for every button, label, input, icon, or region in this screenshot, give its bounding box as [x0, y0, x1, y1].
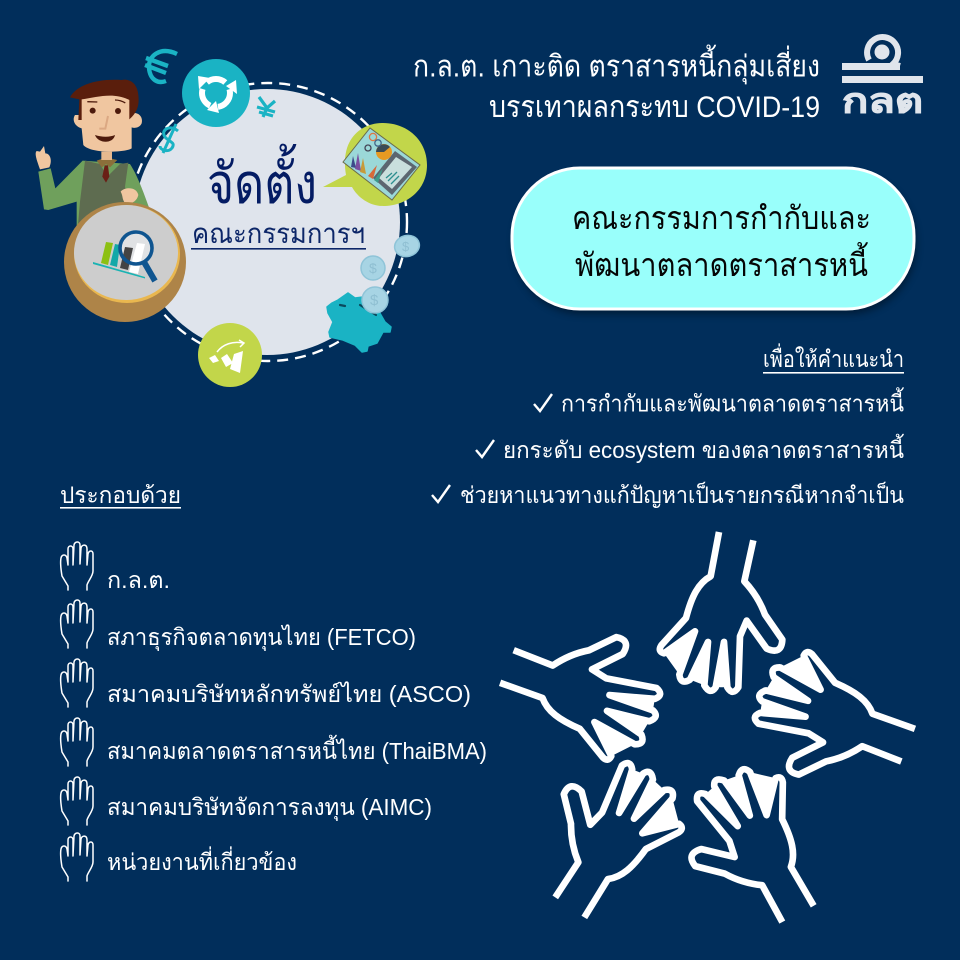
icon: recycle circle: [182, 59, 250, 127]
purpose list: [432, 388, 904, 508]
magnifier disc: [64, 202, 186, 322]
title: [413, 44, 820, 124]
icon: piggy bank: [327, 293, 391, 352]
circle heading: จัดตั้ง: [207, 144, 317, 215]
members list: สมาคมบริษัทหลักทรัพย์ไทย (ASCO): [107, 681, 471, 707]
icon: dollar: [160, 124, 178, 153]
members list: [61, 542, 487, 881]
jacket and arms: [38, 161, 150, 227]
main light circle: [134, 89, 400, 355]
raised hand: [36, 146, 51, 169]
title: ก.ล.ต. เกาะติด ตราสารหนี้กลุ่มเสี่ยง: [413, 44, 820, 86]
illustration: committee circle: [36, 51, 427, 387]
icon: coins: [361, 233, 422, 313]
icon: five joined hands: [491, 532, 924, 947]
person: [36, 80, 150, 227]
purpose heading: เพื่อให้คำแนะนำ: [763, 343, 904, 372]
collar and tie: [97, 157, 117, 167]
panel: committee name pill: [512, 168, 916, 314]
face details: [90, 108, 96, 114]
icon: euro: [145, 51, 177, 82]
panel: committee name pill: คณะกรรมการกำกับและ: [572, 200, 871, 236]
icon: coins: $: [369, 260, 377, 276]
members heading: ประกอบด้วย: [60, 482, 181, 508]
circle sub heading: คณะกรรมการฯ: [192, 218, 365, 249]
resting hand: [121, 188, 138, 203]
icon: coins: $: [402, 239, 410, 254]
members list: ก.ล.ต.: [107, 567, 170, 593]
logo: กลต: [842, 82, 923, 120]
icon: tablet speech bubble: [323, 123, 427, 206]
hair: [70, 80, 139, 120]
purpose list: การกำกับและพัฒนาตลาดตราสารหนี้: [561, 388, 904, 416]
vest: [78, 161, 128, 225]
icon: yen: [257, 97, 275, 117]
title: บรรเทาผลกระทบ COVID-19: [489, 91, 820, 124]
members list: สมาคมบริษัทจัดการลงทุน (AIMC): [107, 794, 432, 821]
icon: growth chart circle: [198, 323, 262, 387]
neck: [101, 152, 112, 160]
panel: committee name pill: พัฒนาตลาดตราสารหนี้: [575, 242, 869, 283]
members list: สภาธุรกิจตลาดทุนไทย (FETCO): [107, 624, 416, 651]
head: [74, 92, 142, 152]
purpose list: ยกระดับ ecosystem ของตลาดตราสารหนี้: [503, 434, 904, 463]
members list: หน่วยงานที่เกี่ยวข้อง: [107, 846, 297, 875]
purpose list: ช่วยหาแนวทางแก้ปัญหาเป็นรายกรณีหากจำเป็น: [460, 480, 904, 508]
dashed ring: [129, 83, 407, 361]
members list: สมาคมตลาดตราสารหนี้ไทย (ThaiBMA): [107, 735, 487, 764]
logo: [842, 37, 923, 120]
icon: coins: $: [370, 292, 379, 309]
